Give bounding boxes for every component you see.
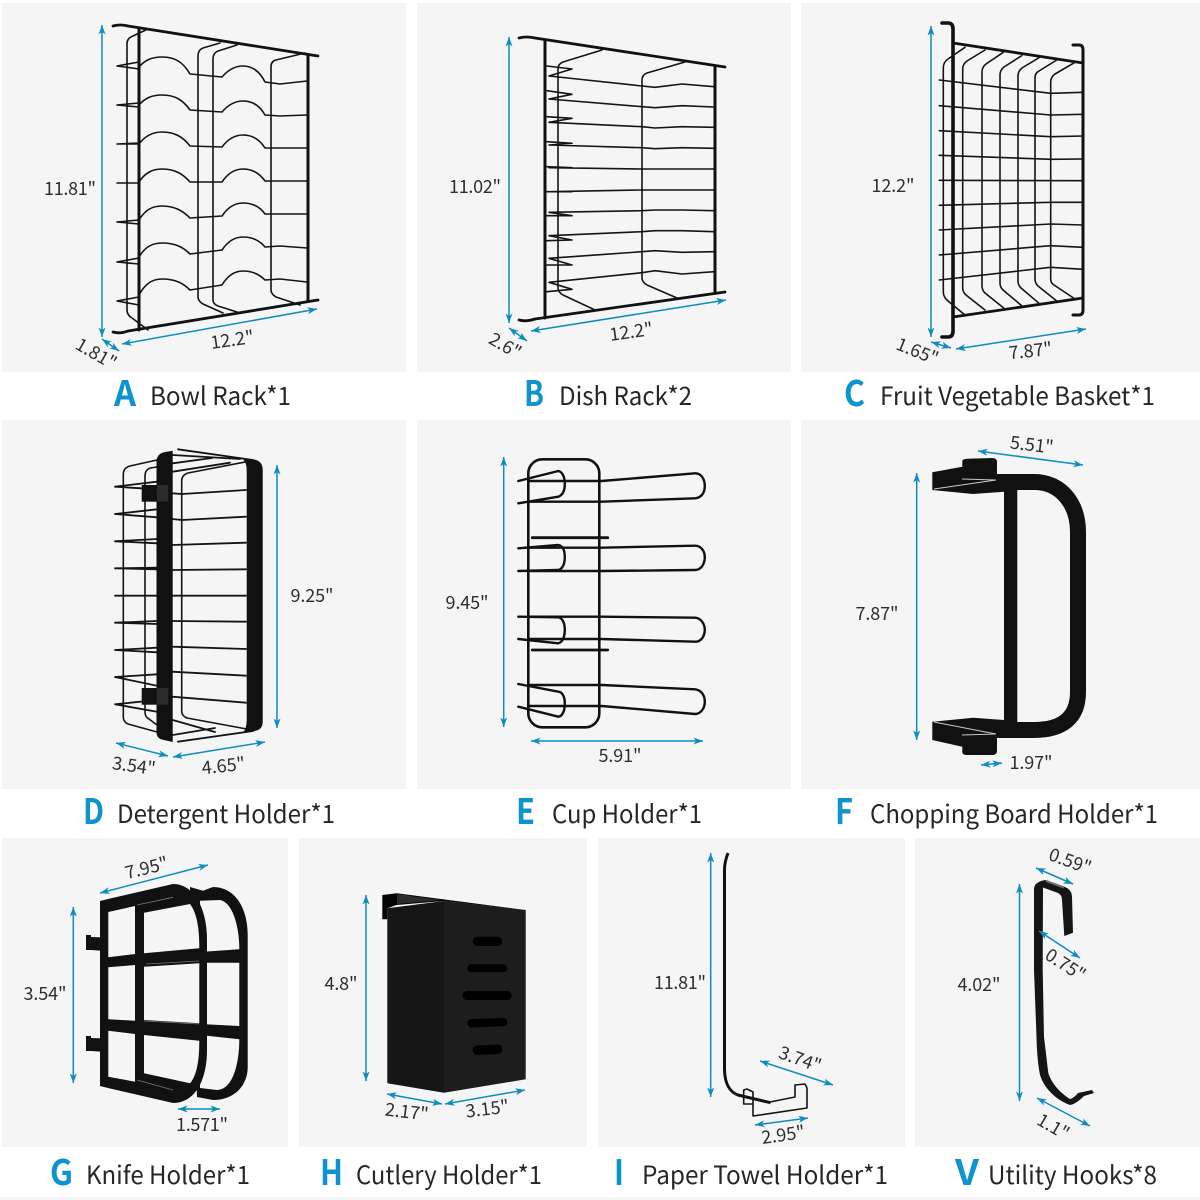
caption: B Dish Rack (524, 366, 692, 417)
dimension: depth 1.571: 1.571" (176, 1111, 228, 1137)
caption: I Paper Towel Holder: Paper Towel Holder*1 (642, 1156, 888, 1192)
illustration: paper towel holder (724, 853, 807, 1116)
caption: F Chopping Board Holder (835, 784, 1158, 835)
caption: G Knife Holder: G (50, 1145, 73, 1196)
panel: B dish rack (417, 3, 791, 372)
icon: upper clip (86, 935, 106, 951)
caption: B Dish Rack: B (524, 366, 544, 417)
panel: C fruit vegetable basket (801, 3, 1200, 372)
caption: D Detergent Holder (83, 784, 335, 835)
dimension: width 7.87 (956, 329, 1086, 365)
dimension: depth 2.6: 2.6" (484, 325, 527, 365)
caption: H Cutlery Holder: Cutlery Holder*1 (356, 1156, 542, 1192)
dimension: height 3.54: 3.54" (24, 980, 66, 1006)
dimension: depth 2.17: 2.17" (384, 1095, 430, 1127)
illustration: detergent holder (115, 449, 263, 742)
icon: lower bracket (932, 718, 1004, 755)
dimension: width 0.59: 0.59" (1046, 841, 1095, 880)
dimension: width 5.51: 5.51" (1009, 428, 1055, 460)
dimension: width 12.2 (122, 309, 317, 355)
icon: upper clip (142, 485, 168, 502)
caption: D Detergent Holder: D (83, 784, 104, 835)
dimension: width 5.91: 5.91" (598, 742, 642, 768)
panel: A bowl rack (2, 3, 406, 375)
panel: I paper towel holder (598, 838, 905, 1150)
dimension: width 12.2: 12.2" (209, 323, 255, 355)
dimension: height 7.87: 7.87" (856, 600, 898, 626)
dimension: depth 3.54: 3.54" (111, 749, 157, 781)
panel: F chopping board holder (801, 420, 1200, 789)
caption: I Paper Towel Holder: I (614, 1145, 624, 1196)
caption: E Cup Holder: Cup Holder*1 (552, 795, 702, 831)
dimension: depth 3.74: 3.74" (776, 1039, 825, 1078)
caption: G Knife Holder: Knife Holder*1 (86, 1156, 250, 1192)
panel: E cup holder (417, 420, 791, 789)
panel: D detergent holder (2, 420, 406, 789)
illustration: bowl rack (113, 25, 318, 333)
icon: slots (462, 937, 512, 1055)
dimension: height 4.02: 4.02" (958, 971, 1000, 997)
caption: C Fruit Vegetable Basket (844, 366, 1155, 417)
caption: A Bowl Rack: Bowl Rack*1 (150, 377, 291, 413)
caption: I Paper Towel Holder (614, 1145, 888, 1196)
dimension: width 3.15: 3.15" (464, 1092, 510, 1124)
dimension: height 9.45: 9.45" (446, 589, 488, 615)
dimension: height 11.81: 11.81" (44, 175, 96, 201)
caption: D Detergent Holder: Detergent Holder*1 (117, 795, 335, 831)
dimension: depth 1.81: 1.81" (71, 331, 122, 375)
dimension: gap 0.75: 0.75" (1040, 941, 1091, 987)
dimension: height 11.02: 11.02" (449, 173, 501, 199)
caption: A Bowl Rack (113, 366, 291, 417)
caption: C Fruit Vegetable Basket: C (844, 366, 865, 417)
dimension: width 5.51 (978, 428, 1083, 465)
caption: E Cup Holder (516, 784, 702, 835)
dimension: width 4.65: 4.65" (200, 750, 246, 780)
dimension: depth 1.65: 1.65" (893, 330, 943, 371)
dimension: width 4.65 (173, 742, 265, 780)
dimension: width 7.95: 7.95" (122, 849, 171, 885)
caption: F Chopping Board Holder: F (835, 784, 853, 835)
dimension: width 12.2: 12.2" (608, 315, 654, 347)
dimension: width 7.87: 7.87" (1007, 335, 1053, 365)
icon: lower clip (86, 1036, 106, 1052)
caption: H Cutlery Holder: H (320, 1145, 343, 1196)
dimension: depth 3.74 (760, 1039, 833, 1085)
icon: lower clip (142, 688, 168, 705)
illustration: basket (939, 23, 1083, 337)
illustration: cutlery holder (382, 893, 526, 1093)
illustration: chopping board holder (932, 458, 1078, 755)
panel: H cutlery holder (299, 838, 587, 1147)
dimension: depth 1.97: 1.97" (1010, 749, 1052, 775)
dimension: width 2.95: 2.95" (760, 1118, 806, 1150)
illustration: utility hook (1034, 880, 1094, 1105)
dimension: hook 1.1: 1.1" (1032, 1106, 1075, 1146)
dimension: width 7.95 (100, 849, 208, 893)
caption: E Cup Holder: E (516, 784, 535, 835)
illustration: dish rack (519, 37, 725, 321)
dimension: width 12.2 (531, 300, 726, 347)
dimension: height 11.81: 11.81" (654, 969, 706, 995)
caption: F Chopping Board Holder: Chopping Board Holder*1 (870, 795, 1158, 831)
dimension: hook 1.1 (1032, 1098, 1090, 1146)
caption: H Cutlery Holder (320, 1145, 542, 1196)
dimension: height 9.25: 9.25" (290, 582, 334, 608)
dimension: depth 1.97 (981, 749, 1052, 775)
panel: V utility hooks (915, 838, 1200, 1147)
caption: G Knife Holder (50, 1145, 250, 1196)
caption: C Fruit Vegetable Basket: Fruit Vegetable Basket*1 (880, 377, 1155, 413)
panel: G knife holder (2, 838, 288, 1147)
dimension: height 4.8: 4.8" (324, 970, 358, 996)
dimension: width 3.15 (445, 1090, 525, 1124)
icon: upper bracket (932, 458, 1004, 494)
illustration: cup holder (518, 459, 705, 727)
dimension: height 12.2: 12.2" (872, 172, 914, 198)
caption: V Utility Hooks: V (954, 1145, 979, 1196)
caption: V Utility Hooks (954, 1145, 1157, 1196)
dimension: depth 3.54 (111, 743, 168, 781)
caption: B Dish Rack: Dish Rack*2 (559, 377, 692, 413)
caption: V Utility Hooks: Utility Hooks*8 (988, 1156, 1157, 1192)
caption: A Bowl Rack: A (113, 366, 137, 417)
illustration: knife holder (86, 884, 248, 1103)
